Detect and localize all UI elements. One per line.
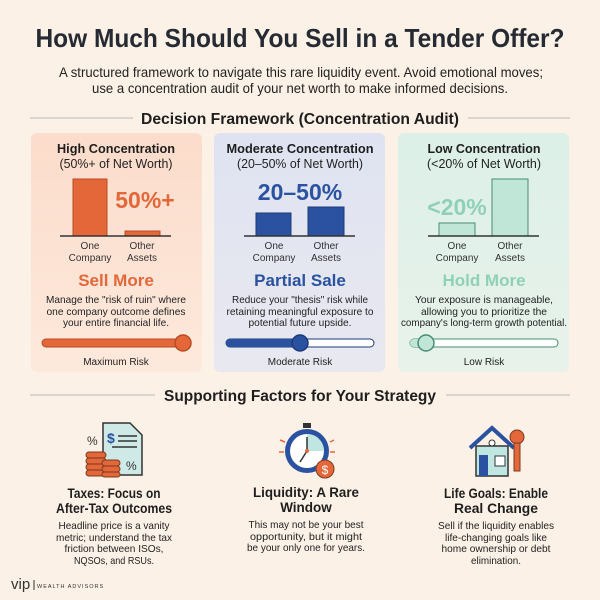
bar chart: low: One bbox=[448, 241, 467, 252]
slider: moderate risk bbox=[226, 335, 374, 368]
section heading: decision framework: Decision Framework (Concentration Audit) bbox=[141, 111, 459, 128]
column: taxes: NQSOs, and RSUs. bbox=[74, 555, 154, 567]
column: life goals: home ownership or debt bbox=[442, 543, 551, 555]
panel: moderate concentration: Moderate Concentration bbox=[226, 141, 374, 156]
bar chart: low: Company bbox=[436, 253, 478, 264]
logo: vip bbox=[11, 576, 30, 593]
logo: WEALTH ADVISORS bbox=[37, 584, 104, 590]
panel: high concentration: Manage the "risk of ruin" where bbox=[46, 294, 186, 306]
column: taxes: friction between ISOs, bbox=[64, 543, 164, 555]
column: life goals: Real Change bbox=[454, 501, 538, 516]
panel: high concentration: High Concentration bbox=[57, 141, 175, 156]
bar chart: high: Assets bbox=[127, 253, 157, 264]
icon: tax document and coins: % bbox=[126, 459, 137, 473]
logo bbox=[11, 576, 104, 593]
slider: moderate risk: Moderate Risk bbox=[268, 357, 333, 368]
column: liquidity: This may not be your best bbox=[248, 519, 364, 531]
bar chart: low: <20% bbox=[427, 194, 487, 220]
column: taxes: metric; understand the tax bbox=[56, 532, 173, 544]
bar chart: high: One bbox=[81, 241, 100, 252]
column: taxes: Taxes: Focus on bbox=[68, 486, 160, 501]
slider: low risk: Low Risk bbox=[464, 357, 505, 368]
icon: tax document and coins bbox=[86, 423, 142, 477]
column: life goals: Life Goals: Enable bbox=[444, 486, 548, 501]
column: life goals: Sell if the liquidity enables bbox=[438, 520, 554, 532]
panel: moderate concentration: Partial Sale bbox=[254, 271, 346, 290]
icon: tax document and coins: % bbox=[87, 434, 98, 448]
bar chart: high bbox=[60, 179, 175, 264]
bar chart: moderate: Other bbox=[313, 241, 339, 252]
panel: low concentration: Low Concentration bbox=[428, 141, 541, 156]
icon: house with key bbox=[470, 428, 524, 476]
panel: low concentration: allowing you to prioritize the bbox=[421, 306, 547, 318]
bar chart: high: Company bbox=[69, 253, 111, 264]
column: liquidity: Window bbox=[280, 500, 332, 515]
slider: maximum risk: Maximum Risk bbox=[83, 357, 150, 368]
column: liquidity bbox=[247, 423, 365, 554]
bar chart: moderate: Company bbox=[253, 253, 295, 264]
bar chart: high: Other bbox=[129, 241, 155, 252]
column: taxes bbox=[56, 423, 173, 567]
bar chart: moderate bbox=[244, 179, 355, 264]
panel: moderate concentration: potential future upside. bbox=[248, 317, 352, 329]
panel: low concentration: company's long-term growth potential. bbox=[401, 317, 567, 329]
panel: moderate concentration bbox=[214, 133, 385, 372]
panel: low concentration: Your exposure is manageable, bbox=[415, 294, 553, 306]
bar chart: moderate: 20–50% bbox=[258, 179, 342, 205]
bar chart: low bbox=[427, 179, 539, 264]
icon: stopwatch with dollar: $ bbox=[322, 463, 329, 477]
column: liquidity: be your only one for years. bbox=[247, 542, 365, 554]
panel: high concentration: one company outcome defines bbox=[46, 306, 186, 318]
column: liquidity: Liquidity: A Rare bbox=[253, 485, 359, 500]
panel: low concentration bbox=[398, 133, 569, 372]
column: life goals bbox=[438, 428, 554, 567]
panel: high concentration: (50%+ of Net Worth) bbox=[60, 156, 172, 171]
panel: moderate concentration: retaining meaningful exposure to bbox=[226, 306, 374, 318]
subtitle: use a concentration audit of your net worth to make informed decisions. bbox=[92, 80, 508, 96]
panel: high concentration: your entire financial life. bbox=[63, 317, 169, 329]
title: How Much Should You Sell in a Tender Offer? bbox=[36, 23, 564, 53]
panel: moderate concentration: (20–50% of Net Worth) bbox=[237, 156, 363, 171]
icon: tax document and coins: $ bbox=[107, 430, 115, 446]
subtitle: A structured framework to navigate this rare liquidity event. Avoid emotional moves; bbox=[59, 64, 543, 80]
column: liquidity: opportunity, but it might bbox=[250, 531, 362, 543]
slider: low risk bbox=[410, 335, 558, 368]
panel: high concentration: Sell More bbox=[78, 271, 154, 290]
subtitle bbox=[59, 64, 543, 96]
section heading: supporting factors: Supporting Factors for Your Strategy bbox=[164, 388, 436, 405]
bar chart: low: Assets bbox=[495, 253, 525, 264]
slider: maximum risk bbox=[42, 335, 191, 368]
bar chart: high: 50%+ bbox=[115, 187, 175, 213]
panel: moderate concentration: Reduce your "thesis" risk while bbox=[232, 294, 368, 306]
column: life goals: life-changing goals like bbox=[445, 532, 547, 544]
column: life goals: elimination. bbox=[471, 555, 521, 567]
panel: low concentration: (<20% of Net Worth) bbox=[427, 156, 541, 171]
column: taxes: After-Tax Outcomes bbox=[56, 501, 172, 516]
panel: high concentration bbox=[31, 133, 202, 372]
column: taxes: Headline price is a vanity bbox=[58, 520, 170, 532]
bar chart: moderate: Assets bbox=[311, 253, 341, 264]
bar chart: moderate: One bbox=[265, 241, 284, 252]
bar chart: low: Other bbox=[497, 241, 523, 252]
panel: low concentration: Hold More bbox=[442, 271, 526, 290]
